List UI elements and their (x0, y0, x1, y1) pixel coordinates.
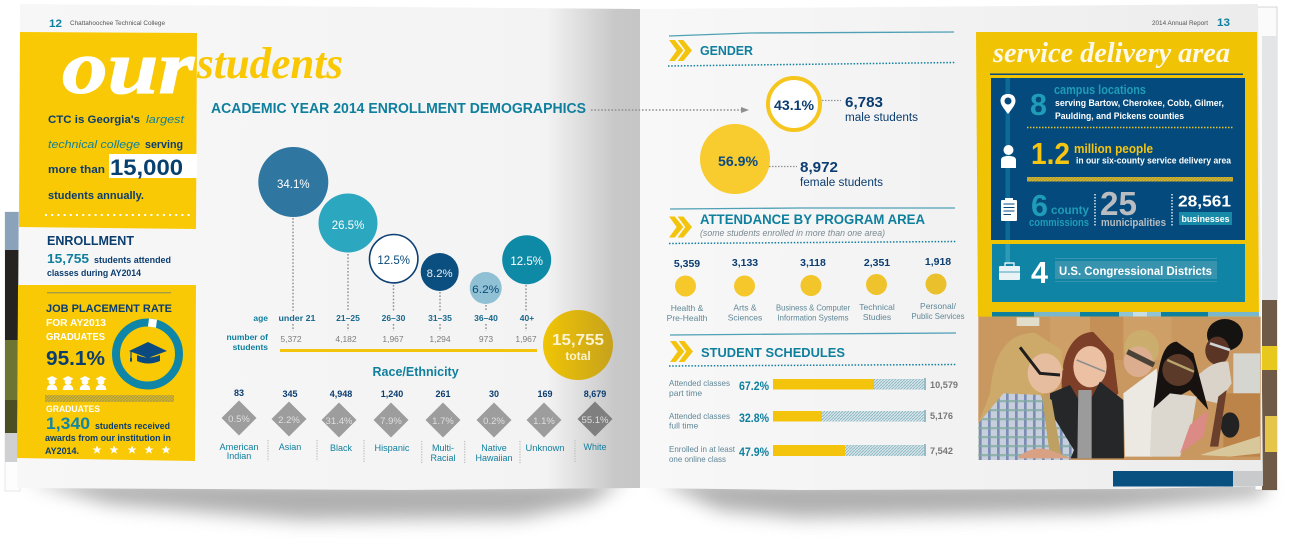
ethnicity counts: 261 (435, 389, 451, 399)
page header right: 2014 Annual Report (1152, 20, 1208, 27)
icon: person (1001, 145, 1016, 168)
bar: online class: 7,542 (930, 446, 953, 457)
panel: navy stats: municipalities (1101, 217, 1166, 229)
program counts: 5,359 (674, 258, 700, 270)
ethnicity labels: Black (330, 443, 352, 453)
bubble: 26-30: 12.5% (377, 255, 410, 267)
panel: congressional districts: 4 (1031, 255, 1049, 290)
male stat (768, 78, 918, 130)
section: attendance by program area: ATTENDANCE BY PROGRAM AREA (700, 212, 925, 227)
icon: chevrons (670, 341, 693, 362)
panel: navy stats (991, 78, 1245, 240)
program labels: Personal/ (920, 301, 957, 311)
heading: our: our (62, 26, 196, 110)
bar: full time: full time (669, 420, 699, 430)
icon: chevrons (669, 40, 692, 61)
intro text: students annually. (48, 190, 144, 202)
female stat: 56.9% (718, 153, 759, 169)
bar: full time: Attended classes (669, 411, 730, 421)
bubble: 31-35: 8.2% (427, 268, 453, 280)
panel: job placement: students received (95, 421, 170, 431)
bar: online class (669, 444, 953, 464)
diamond values: 2.2% (278, 415, 300, 426)
icon: chevrons (669, 216, 692, 238)
bar: part time (669, 378, 958, 398)
program counts: 1,918 (925, 256, 951, 268)
right page (640, 4, 1263, 490)
program labels: Business & Computer (776, 302, 850, 312)
page header right: 13 (1217, 17, 1230, 29)
panel: navy stats: campus locations (1054, 83, 1146, 97)
panel: congressional districts (992, 244, 1245, 302)
program counts: 2,351 (864, 257, 890, 269)
bubble: 36-40: 6.2% (472, 284, 499, 296)
section: student schedules (669, 333, 958, 464)
under page: left photo edge (5, 212, 20, 491)
panel: navy stats: in our six-county service delivery area (1076, 156, 1232, 166)
arrow to gender (591, 107, 749, 113)
icon: graduates row (47, 376, 106, 390)
diamond values: 0.2% (483, 416, 505, 427)
ethnicity labels: Racial (430, 453, 456, 463)
diamond values: 7.9% (380, 416, 402, 427)
male stat: male students (845, 112, 918, 124)
panel: job placement: awards from our institution in (45, 433, 171, 443)
bar: full time: 5,176 (930, 411, 953, 422)
donut chart 95.1% (116, 322, 179, 386)
bar: part time: 10,579 (930, 380, 958, 391)
diamond values: 0.5% (228, 414, 250, 425)
program labels: Pre-Health (667, 313, 708, 323)
program counts (674, 256, 951, 270)
diamond values: 1.1% (533, 416, 555, 427)
page header left: Chattahoochee Technical College (70, 20, 165, 27)
student 3 (1123, 330, 1160, 457)
chart: race and ethnicity (220, 365, 612, 463)
number of students labels: 1,294 (429, 334, 451, 344)
left page (17, 4, 640, 490)
bar: online class: one online class (669, 454, 726, 464)
bar: part time: Attended classes (669, 378, 730, 388)
bubble: total: total (565, 349, 591, 363)
colour strip above photo (992, 312, 1259, 316)
panel: navy stats: 25 (1100, 185, 1137, 222)
panel: navy stats: county (1051, 203, 1089, 217)
program labels: Health & (671, 303, 704, 313)
panel: job placement: 95.1% (46, 348, 105, 370)
panel: navy stats: 1.2 (1031, 136, 1070, 171)
ethnicity labels: Multi- (432, 443, 454, 453)
section: gender (668, 32, 955, 194)
bubble: under 21: 34.1% (277, 179, 310, 191)
bubble: 21-25: 26.5% (332, 220, 364, 232)
bubble: total (543, 310, 613, 380)
program labels: Sciences (728, 312, 762, 322)
icon: clipboard (1001, 198, 1017, 221)
bubble: 31-35 (421, 253, 459, 291)
ethnicity counts: 1,240 (381, 389, 403, 399)
program labels: Technical (859, 302, 895, 312)
page header right (1152, 17, 1230, 29)
panel: job placement: GRADUATES (46, 332, 105, 343)
ethnicity counts: 169 (537, 389, 553, 399)
ethnicity labels: Asian (279, 442, 301, 452)
bubble: 36-40 (470, 272, 502, 304)
male stat: 43.1% (774, 97, 815, 113)
ethnicity labels: Native (481, 443, 507, 453)
ethnicity labels (220, 442, 607, 463)
bubble: 40+ (502, 235, 551, 284)
age labels: 26–30 (382, 313, 406, 323)
icon: stars (92, 446, 170, 454)
panel: navy stats: 28,561 (1178, 194, 1231, 210)
panel: job placement: 1,340 (46, 414, 90, 433)
icon: map pin (1000, 94, 1016, 114)
panel: navy stats: 6 (1031, 188, 1048, 223)
female stat: female students (800, 177, 883, 189)
ethnicity labels: White (583, 442, 607, 452)
panel: navy stats: commissions (1029, 217, 1089, 229)
number of students labels: 5,372 (280, 334, 302, 344)
intro text: 15,000 (110, 155, 183, 180)
panel: congressional districts: U.S. Congressional Districts (1059, 266, 1212, 278)
female stat (700, 124, 883, 194)
panel: navy stats: Paulding, and Pickens counties (1055, 111, 1184, 122)
page header left: 12 (49, 18, 62, 30)
bubble: total: 15,755 (552, 332, 604, 349)
heading: service delivery area: service delivery area (992, 37, 1230, 69)
ethnicity labels: Indian (227, 451, 251, 461)
intro text (45, 114, 197, 215)
student 2 (1050, 332, 1124, 458)
section: attendance by program area: (some students enrolled in more than one area) (700, 228, 885, 239)
bubble: under 21 (258, 147, 328, 217)
panel: intro (19, 26, 197, 229)
student 5 (1197, 319, 1243, 447)
bubble: 40+: 12.5% (510, 256, 543, 268)
enrollment block: students attended (94, 255, 171, 265)
intro text: CTC is Georgia's (48, 114, 140, 126)
bubble: 26-30 (370, 235, 418, 283)
student 1 (978, 333, 1074, 460)
age labels: 21–25 (336, 313, 360, 323)
under page: right edge (1255, 7, 1277, 490)
icon: briefcase (999, 263, 1020, 280)
panel: navy stats: 8 (1030, 87, 1047, 122)
ethnicity counts: 4,948 (330, 389, 352, 399)
program labels (667, 301, 964, 323)
program dots (675, 274, 946, 296)
diamonds (222, 400, 612, 438)
diamond values: 31.4% (326, 416, 353, 427)
panel: job placement: FOR AY2013 (46, 318, 106, 329)
heading: race/ethnicity: Race/Ethnicity (373, 365, 459, 379)
photo: students in lab (978, 317, 1261, 460)
ethnicity labels: Hawaiian (476, 453, 512, 463)
intro text: serving (145, 139, 183, 151)
number of students labels: 1,967 (515, 334, 537, 344)
diamond values: 55.1% (582, 415, 609, 426)
male stat: 6,783 (845, 95, 883, 111)
enrollment block: classes during AY2014 (47, 268, 141, 278)
chart: age bubbles (226, 147, 613, 380)
ethnicity counts: 8,679 (584, 389, 606, 399)
panel: job placement: JOB PLACEMENT RATE (46, 303, 172, 315)
bubble: 21-25 (318, 194, 378, 252)
bar: online class: 47.9% (739, 447, 769, 459)
icon: graduation cap (129, 342, 167, 364)
enrollment block (47, 234, 171, 278)
ethnicity labels: American (220, 442, 258, 452)
bar: full time (669, 410, 953, 430)
program labels: Arts & (733, 302, 757, 312)
panel: service delivery area (976, 32, 1259, 317)
panel: job placement (17, 285, 196, 461)
enrollment block: 15,755 (47, 251, 89, 266)
intro text: largest (146, 114, 185, 126)
diamond values: 1.7% (432, 416, 454, 427)
program labels: Studies (863, 312, 891, 322)
heading: students: students (196, 39, 343, 88)
ethnicity counts (234, 388, 606, 399)
ethnicity labels: Hispanic (374, 443, 410, 453)
section: gender: GENDER (700, 44, 753, 58)
bar: part time: part time (669, 388, 702, 398)
footer block: page bottom right (1113, 471, 1263, 486)
number of students labels: 1,967 (382, 334, 404, 344)
intro text: more than (48, 164, 105, 176)
ethnicity counts: 345 (282, 389, 298, 399)
female stat: 8,972 (800, 160, 838, 176)
page header left (49, 18, 165, 30)
program counts: 3,133 (732, 257, 758, 269)
age labels: 36–40 (474, 313, 498, 323)
panel: navy stats: businesses (1182, 214, 1230, 225)
section: student schedules: STUDENT SCHEDULES (701, 345, 845, 360)
number of students labels: students (233, 342, 268, 352)
student 4 (1150, 342, 1208, 457)
age labels: age (253, 313, 268, 323)
panel: navy stats: million people (1074, 142, 1153, 156)
age labels: 40+ (520, 313, 534, 323)
program counts: 3,118 (800, 257, 826, 269)
number of students labels: number of (226, 332, 268, 342)
panel: navy stats: serving Bartow, Cherokee, Cobb, Gilmer, (1055, 98, 1224, 109)
book drop shadow (25, 480, 1268, 520)
ethnicity labels: Unknown (526, 443, 564, 453)
panel: job placement: AY2014. (45, 446, 79, 456)
heading: enrollment demographics: ACADEMIC YEAR 2014 ENROLLMENT DEMOGRAPHICS (211, 101, 586, 117)
enrollment block: ENROLLMENT (47, 234, 134, 248)
bar: part time: 67.2% (739, 381, 769, 393)
program labels: Information Systems (778, 312, 848, 322)
program labels: Public Services (912, 311, 964, 321)
bar: full time: 32.8% (739, 413, 769, 425)
intro text: technical college (48, 139, 140, 151)
ethnicity counts: 83 (234, 388, 244, 398)
panel: job placement: GRADUATES (46, 404, 100, 415)
number of students labels: 4,182 (335, 334, 357, 344)
bar: online class: Enrolled in at least (669, 444, 736, 454)
section: attendance by program area (667, 208, 964, 323)
age labels: 31–35 (428, 313, 452, 323)
ethnicity counts: 30 (489, 389, 499, 399)
age labels (253, 313, 534, 323)
diamond values (228, 414, 609, 427)
number of students labels: 973 (479, 334, 493, 344)
age labels: under 21 (278, 313, 316, 323)
number of students labels (226, 332, 537, 352)
